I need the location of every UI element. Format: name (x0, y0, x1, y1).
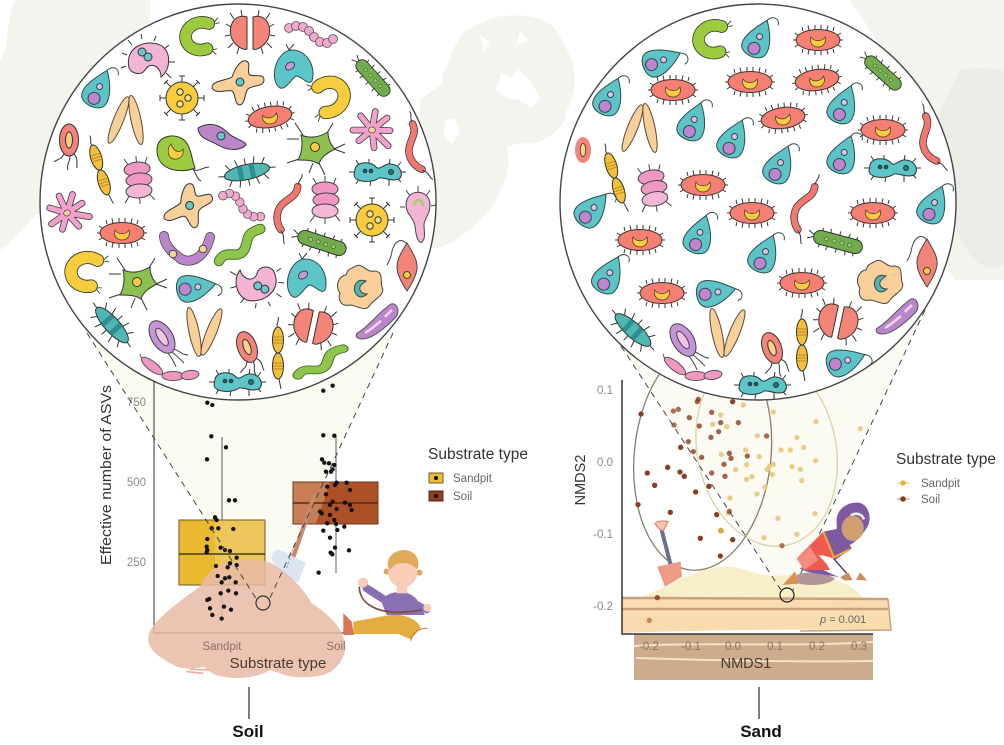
microbe (310, 176, 340, 224)
microbe (725, 67, 775, 97)
y ticks: sand chart: -0.1 (593, 529, 613, 541)
y axis ticks: 500 (127, 477, 146, 489)
x ticks: sand chart (639, 641, 867, 653)
microbe (752, 330, 791, 381)
microbe (707, 308, 749, 358)
wooden sandbox base (634, 634, 873, 680)
data points: soil boxplot (204, 383, 354, 621)
x ticks: sand chart: 0.2 (809, 641, 825, 653)
heading: Sand: Sand (740, 722, 782, 741)
microbe (744, 225, 788, 277)
microbe (662, 354, 723, 381)
microbe (678, 170, 728, 200)
microbe (674, 93, 715, 144)
microbe (787, 171, 820, 244)
microbe (68, 250, 110, 294)
ellipse: soil (623, 333, 783, 577)
axis title: NMDS2: NMDS2 (573, 455, 589, 505)
microbe (351, 108, 394, 150)
illustration: child with rope (343, 550, 431, 641)
microbe (274, 44, 313, 88)
microbe (243, 98, 297, 136)
microbe (356, 304, 398, 339)
microbe (602, 300, 664, 360)
microbe (756, 100, 810, 136)
shovel in soil (272, 497, 314, 582)
y ticks: sand chart: -0.2 (593, 601, 613, 613)
box: sandpit (179, 437, 265, 618)
microbe (184, 307, 226, 357)
legend: sand chart: Soil (921, 494, 940, 506)
ellipses and scatter points (623, 333, 863, 623)
microbe (637, 278, 687, 308)
microbe (164, 236, 210, 261)
y axis ticks: 750 (127, 397, 146, 409)
microbe (219, 229, 260, 261)
microbe (226, 259, 290, 315)
microbe (289, 223, 349, 261)
microbe (54, 124, 78, 170)
microbe (699, 21, 733, 58)
microbe (284, 22, 338, 48)
x ticks: sand chart: -0.1 (681, 641, 701, 653)
x ticks: sand chart: 0.3 (851, 641, 867, 653)
y axis line (154, 380, 403, 633)
microbe (397, 111, 433, 184)
microbe (97, 218, 147, 248)
zoom cone: soil (87, 333, 393, 600)
microbe (734, 372, 791, 399)
y axis title: Effective number of ASVs (98, 385, 115, 565)
microbe (856, 47, 906, 95)
microbe (84, 134, 116, 206)
microbe (144, 316, 188, 367)
microbe (387, 240, 417, 291)
microbe (648, 75, 698, 105)
wooden sandbox plank (622, 598, 891, 633)
legend: soil chart (428, 446, 528, 503)
microbe (570, 181, 620, 233)
microbe (82, 294, 142, 356)
connector: soil (248, 687, 250, 719)
microbe (78, 60, 122, 112)
microbe (42, 188, 91, 236)
legend: sand chart (896, 451, 996, 506)
circle outline (560, 4, 956, 400)
connector: sand (758, 687, 760, 719)
legend: soil chart: Soil (453, 491, 472, 503)
microbe (350, 198, 394, 242)
legend: sand chart: Substrate type (896, 451, 996, 468)
microbe (824, 126, 865, 177)
microbe (793, 25, 843, 55)
axes: sand chart (622, 380, 873, 634)
microbe (349, 159, 406, 186)
microbe (713, 110, 757, 162)
microbe (589, 68, 633, 120)
microbe (157, 179, 219, 235)
microbe (759, 136, 803, 188)
microbe (174, 270, 223, 304)
microbe (272, 317, 284, 389)
microbe (214, 187, 269, 224)
microbe (634, 162, 672, 214)
microbe (186, 18, 220, 55)
heading: Soil: Soil (232, 722, 264, 741)
microbe (639, 39, 690, 80)
microbe (157, 136, 209, 181)
panel: sand NMDS plot (573, 310, 996, 680)
microbe (665, 319, 709, 370)
microbe (796, 309, 808, 381)
soil points (635, 397, 785, 623)
zoom dashed lines: soil (87, 333, 393, 600)
legend: soil chart: Sandpit (453, 473, 493, 485)
microbe (160, 76, 204, 120)
legend: soil chart: Substrate type (428, 446, 528, 463)
x ticks: sand chart: 0.1 (767, 641, 783, 653)
x ticks: sand chart: 0.0 (725, 641, 741, 653)
microbe (790, 62, 844, 98)
microbe (212, 61, 264, 105)
legend: sand chart: Sandpit (921, 478, 961, 490)
microbe (777, 268, 827, 298)
y ticks: sand chart: 0.1 (597, 385, 613, 397)
y ticks: sand chart (593, 385, 613, 613)
x axis labels: soil chart: Soil (326, 641, 346, 653)
microbe (216, 152, 278, 192)
sample marker circle: sand (780, 588, 794, 602)
zoom cone: sand (615, 310, 925, 590)
microbe (805, 223, 865, 259)
microbe (680, 206, 721, 257)
zoom dashed lines: sand (615, 310, 925, 590)
microbe (694, 275, 743, 309)
microbe (209, 369, 266, 396)
microbe (909, 103, 948, 176)
microbe (109, 258, 167, 310)
microbe (198, 124, 246, 150)
microbe (287, 123, 345, 175)
illustration: spade in sand (655, 521, 682, 587)
microbe (913, 176, 957, 228)
microbe (618, 103, 660, 153)
microbe (858, 115, 908, 145)
circle outline (40, 4, 436, 400)
microbe (599, 142, 631, 214)
y axis ticks: 250 (127, 557, 146, 569)
microbe (121, 155, 155, 205)
microbe (588, 246, 633, 298)
microbe (284, 299, 342, 353)
microbe (225, 10, 275, 54)
x axis labels: soil chart: Sandpit (202, 641, 242, 653)
illustration: girl digging (783, 503, 870, 585)
x ticks: sand chart: -0.2 (639, 641, 659, 653)
background foliage pattern (0, 0, 1004, 280)
x axis labels: soil chart (202, 641, 346, 672)
microbe (400, 186, 436, 242)
microbe (738, 10, 782, 62)
microbe (303, 73, 350, 122)
sand heap (643, 567, 863, 598)
ellipse: sandpit (679, 340, 855, 560)
microbe (809, 294, 867, 348)
microbe (121, 34, 175, 78)
microbe (338, 265, 383, 309)
magnified circle: sand microbes (560, 4, 957, 400)
soil mound (148, 560, 345, 678)
x axis labels: soil chart: Substrate type (230, 655, 326, 672)
magnified circle: soil microbes (40, 4, 436, 400)
sandpit points (710, 402, 863, 540)
microbe (907, 236, 937, 287)
microbe (615, 225, 665, 255)
microbe (864, 155, 921, 182)
microbe (858, 260, 903, 304)
microbe (824, 76, 865, 127)
microbe (270, 171, 303, 244)
microbe (575, 137, 591, 163)
axis title: NMDS1: NMDS1 (721, 656, 771, 672)
box: soil (293, 435, 378, 573)
y axis ticks (127, 397, 146, 569)
microbe (104, 95, 146, 145)
y ticks: sand chart: 0.0 (597, 457, 613, 469)
microbe (876, 299, 918, 334)
microbe (227, 329, 266, 380)
microbe (298, 349, 343, 375)
sample marker circle: soil (256, 596, 270, 610)
microbe (139, 354, 200, 381)
microbe (347, 51, 395, 101)
microbe (848, 198, 898, 228)
p value: p = 0.001 (819, 614, 866, 626)
microbe (287, 253, 326, 297)
microbe (727, 198, 777, 228)
panel: soil boxplot (87, 333, 528, 678)
microbe (823, 340, 874, 380)
